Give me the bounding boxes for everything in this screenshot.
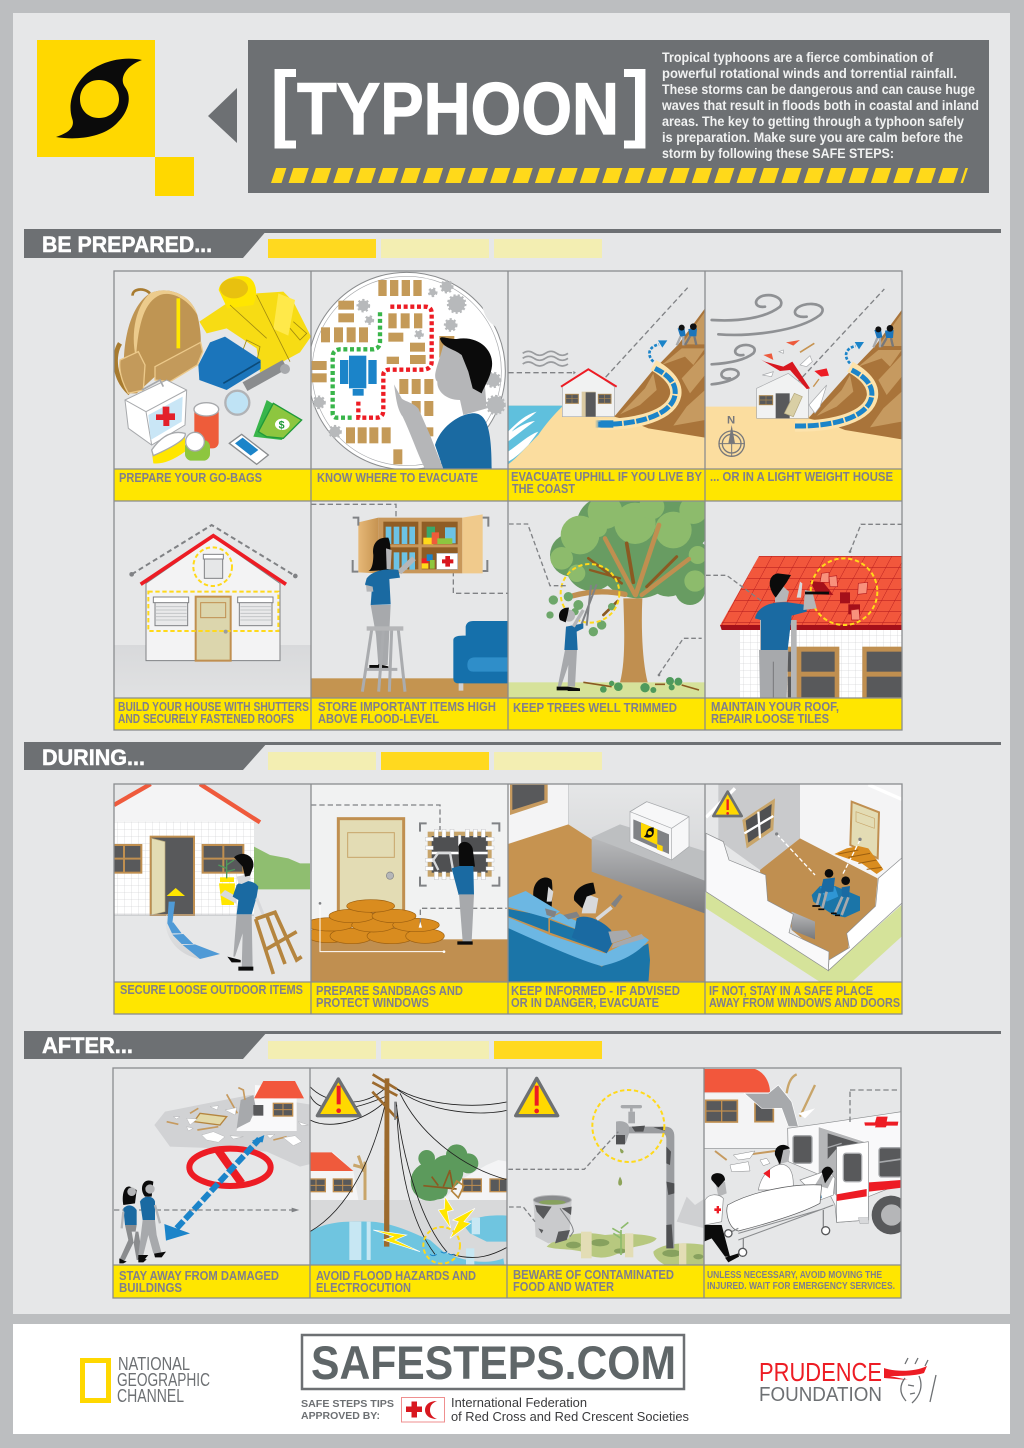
- illustration: people avoiding damaged building: [114, 1081, 310, 1264]
- illustration: house with shutters: [114, 524, 310, 682]
- panel: secure loose outdoor items: [107, 780, 317, 1020]
- caption: KEEP TREES WELL TRIMMED: [513, 700, 677, 715]
- logo: prudence foundation: [759, 1357, 936, 1406]
- caption: PREPARE YOUR GO-BAGS: [119, 470, 262, 485]
- logo: national geographic channel: GEOGRAPHIC: [117, 1370, 210, 1390]
- website box: SAFESTEPS.COM: [311, 1336, 676, 1389]
- panel: keep trees trimmed: [505, 490, 712, 735]
- caption: AND SECURELY FASTENED ROOFS: [118, 711, 294, 726]
- section heading: after: [24, 1031, 1001, 1059]
- approval text and red cross logo: APPROVED BY:: [301, 1410, 380, 1422]
- caption: FOOD AND WATER: [513, 1279, 615, 1294]
- caption: [508, 698, 705, 730]
- caption: AWAY FROM WINDOWS AND DOORS: [709, 995, 900, 1010]
- header panel: [248, 40, 989, 193]
- logo: prudence foundation: FOUNDATION: [759, 1384, 882, 1406]
- illustration: contaminated tap and bucket: [508, 1076, 704, 1264]
- caption: [705, 469, 902, 501]
- panel: build your house: [110, 495, 317, 735]
- illustration: go-bag items: $: [279, 419, 285, 431]
- caption: PREPARE SANDBAGS AND: [316, 983, 463, 998]
- caption: [311, 698, 508, 730]
- caption: AVOID FLOOD HAZARDS AND: [316, 1268, 476, 1283]
- caption: STORE IMPORTANT ITEMS HIGH: [318, 699, 496, 714]
- approval text and red cross logo: International Federation: [451, 1396, 587, 1410]
- panel: stay in a safe place: [702, 780, 908, 1020]
- section heading: during: DURING...: [42, 745, 145, 770]
- caption: ... OR IN A LIGHT WEIGHT HOUSE: [710, 469, 893, 484]
- intro text: is preparation. Make sure you are calm before the: [662, 130, 963, 145]
- caption: THE COAST: [512, 481, 575, 496]
- panel: prepare sandbags: [306, 780, 510, 1020]
- illustration: family watching television: [508, 784, 704, 982]
- footer panel background: [13, 1324, 1010, 1434]
- panel: know where to evacuate: [308, 265, 510, 505]
- intro text: Tropical typhoons are a fierce combination of: [662, 50, 933, 65]
- illustration: evacuation map: [312, 272, 506, 468]
- panel: maintain your roof: [702, 495, 909, 735]
- illustration: paramedics and ambulance: [704, 1069, 900, 1262]
- caption: EVACUATE UPHILL IF YOU LIVE BY: [511, 469, 702, 484]
- panel: evacuate uphill: [505, 265, 712, 505]
- panel: avoid flood hazards: [307, 1065, 513, 1305]
- caption: [114, 469, 311, 501]
- panel: store important items high: [310, 495, 510, 735]
- intro text: waves that result in floods both in coastal and inland: [661, 98, 979, 113]
- caption: [704, 1265, 901, 1298]
- panel: keep informed: [505, 780, 712, 1020]
- caption: BUILD YOUR HOUSE WITH SHUTTERS: [118, 699, 309, 714]
- caption: [705, 698, 902, 730]
- panel: beware of contaminated food and water: [505, 1065, 712, 1305]
- panel: stay away from damaged buildings: [110, 1065, 317, 1305]
- caption: STAY AWAY FROM DAMAGED: [119, 1268, 279, 1283]
- title: ]: [623, 55, 650, 150]
- caption: KEEP INFORMED - IF ADVISED: [511, 983, 680, 998]
- approval text and red cross logo: of Red Cross and Red Crescent Societies: [451, 1410, 689, 1424]
- caption: [311, 469, 508, 501]
- arrow pointing to logo: [208, 88, 237, 143]
- caption: ELECTROCUTION: [316, 1280, 411, 1295]
- caption: [310, 1265, 507, 1298]
- caption: SECURE LOOSE OUTDOOR ITEMS: [120, 982, 303, 997]
- illustration: man repairing roof: [706, 524, 902, 698]
- logo: typhoon symbol on yellow blocks: [37, 40, 194, 196]
- caption: BEWARE OF CONTAMINATED: [513, 1267, 674, 1282]
- caption: [114, 698, 311, 730]
- caption: ABOVE FLOOD-LEVEL: [318, 711, 439, 726]
- illustration: man trimming tree: [508, 502, 704, 698]
- illustration: woman at cabinet: [312, 504, 508, 698]
- caption: [705, 982, 902, 1014]
- caption: UNLESS NECESSARY, AVOID MOVING THE: [707, 1269, 882, 1281]
- caption: [114, 982, 311, 1014]
- intro text: [661, 50, 979, 161]
- section heading: after: AFTER...: [42, 1033, 133, 1058]
- approval text and red cross logo: [301, 1396, 689, 1424]
- logo: national geographic channel: [82, 1354, 210, 1406]
- title: TYPHOON: [297, 69, 619, 150]
- caption: KNOW WHERE TO EVACUATE: [317, 470, 478, 485]
- intro text: storm by following these SAFE STEPS:: [662, 146, 894, 161]
- illustration: fallen power lines in flood: [310, 1073, 506, 1264]
- section heading: be prepared: [24, 229, 1001, 258]
- illustration: coast house and hill: [508, 287, 704, 468]
- caption: [508, 469, 705, 501]
- caption: [311, 982, 508, 1014]
- illustration: man carrying items indoors: [114, 784, 310, 974]
- title: [: [270, 55, 297, 150]
- caption: MAINTAIN YOUR ROOF,: [711, 699, 839, 714]
- caption: [507, 1265, 704, 1298]
- caption: IF NOT, STAY IN A SAFE PLACE: [709, 983, 873, 998]
- panel: prepare your go-bags: [110, 265, 510, 505]
- illustration: go-bag items: [114, 276, 310, 465]
- caption: PROTECT WINDOWS: [316, 995, 429, 1010]
- caption: [113, 1265, 310, 1298]
- caption: BUILDINGS: [119, 1280, 182, 1295]
- illustration: cutaway room: [706, 784, 902, 982]
- section heading: be prepared: BE PREPARED...: [42, 232, 212, 257]
- panel: light weight house: [702, 265, 908, 505]
- caption: [508, 982, 705, 1014]
- caption: REPAIR LOOSE TILES: [711, 711, 829, 726]
- logo: prudence foundation: PRUDENCE: [759, 1357, 882, 1387]
- caption: OR IN DANGER, EVACUATE: [511, 995, 659, 1010]
- illustration: sandbags at door: [312, 785, 508, 982]
- logo: national geographic channel: CHANNEL: [117, 1386, 184, 1406]
- logo: national geographic channel: NATIONAL: [118, 1354, 190, 1374]
- intro text: areas. The key to getting through a typhoon safely: [662, 114, 964, 129]
- intro text: powerful rotational winds and torrential rainfall.: [662, 66, 957, 81]
- illustration: wind damaged house: [706, 288, 902, 468]
- intro text: These storms can be dangerous and can cause huge: [662, 82, 975, 97]
- illustration: wind damaged house: N: [727, 414, 735, 426]
- panel: avoid moving the injured: [702, 1065, 910, 1305]
- approval text and red cross logo: SAFE STEPS TIPS: [301, 1398, 394, 1410]
- section heading: during: [24, 742, 1001, 770]
- grid lines: [113, 271, 902, 1298]
- caption: INJURED. WAIT FOR EMERGENCY SERVICES.: [707, 1280, 895, 1292]
- hazard stripe: [271, 168, 968, 183]
